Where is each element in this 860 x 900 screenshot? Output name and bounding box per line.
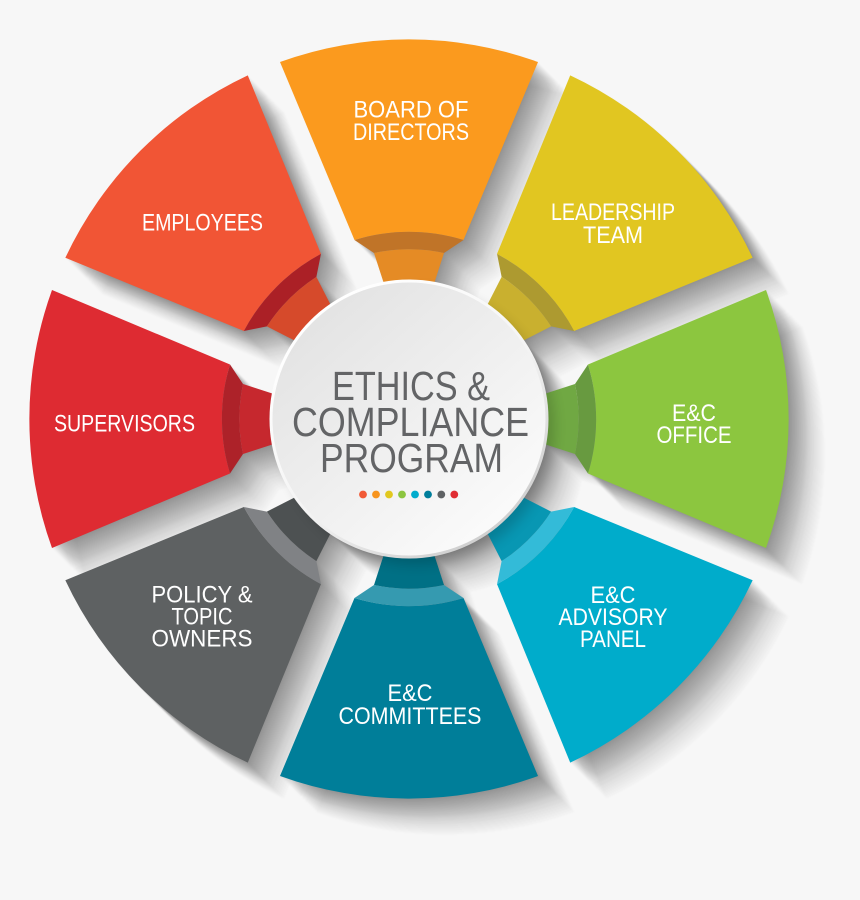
segment: E&C committees: COMMITTEES: [338, 703, 482, 730]
segment: supervisors: SUPERVISORS: [54, 410, 195, 438]
segment: E&C advisory panel: [409, 419, 769, 779]
segment: E&C committees: E&C: [388, 680, 432, 707]
segment: E&C advisory panel: ADVISORY: [558, 604, 668, 631]
segment: board of directors: DIRECTORS: [353, 119, 469, 146]
segment: E&C advisory panel: E&C: [590, 582, 636, 609]
segment: E&C office: E&C: [672, 400, 716, 427]
segment: board of directors: [280, 39, 538, 290]
centre title: [292, 363, 529, 481]
centre title: COMPLIANCE: [292, 399, 529, 445]
centre title: PROGRAM: [320, 435, 503, 481]
segment: E&C office: [538, 290, 789, 548]
segment: leadership team: [409, 59, 769, 419]
centre title: ETHICS &: [332, 363, 490, 409]
row of coloured dots: [359, 491, 458, 498]
segment: leadership team: LEADERSHIP: [551, 199, 675, 226]
segment: policy and topic owners: [49, 419, 409, 779]
segment: E&C office: OFFICE: [656, 422, 732, 449]
segment: employees: EMPLOYEES: [142, 210, 263, 236]
segment: policy and topic owners: OWNERS: [152, 626, 252, 652]
segment: policy and topic owners: TOPIC: [172, 604, 232, 630]
segment: leadership team: TEAM: [583, 222, 643, 249]
soft shadow of centre disc on segment necks: [279, 289, 555, 565]
centre disc: [270, 280, 548, 558]
segment: E&C advisory panel: PANEL: [580, 626, 646, 653]
segment: board of directors: BOARD OF: [354, 96, 468, 124]
segment: E&C committees: [280, 548, 538, 799]
segment: employees: [49, 59, 409, 419]
segment: supervisors: [29, 290, 280, 548]
segment: policy and topic owners: POLICY &: [152, 582, 252, 608]
